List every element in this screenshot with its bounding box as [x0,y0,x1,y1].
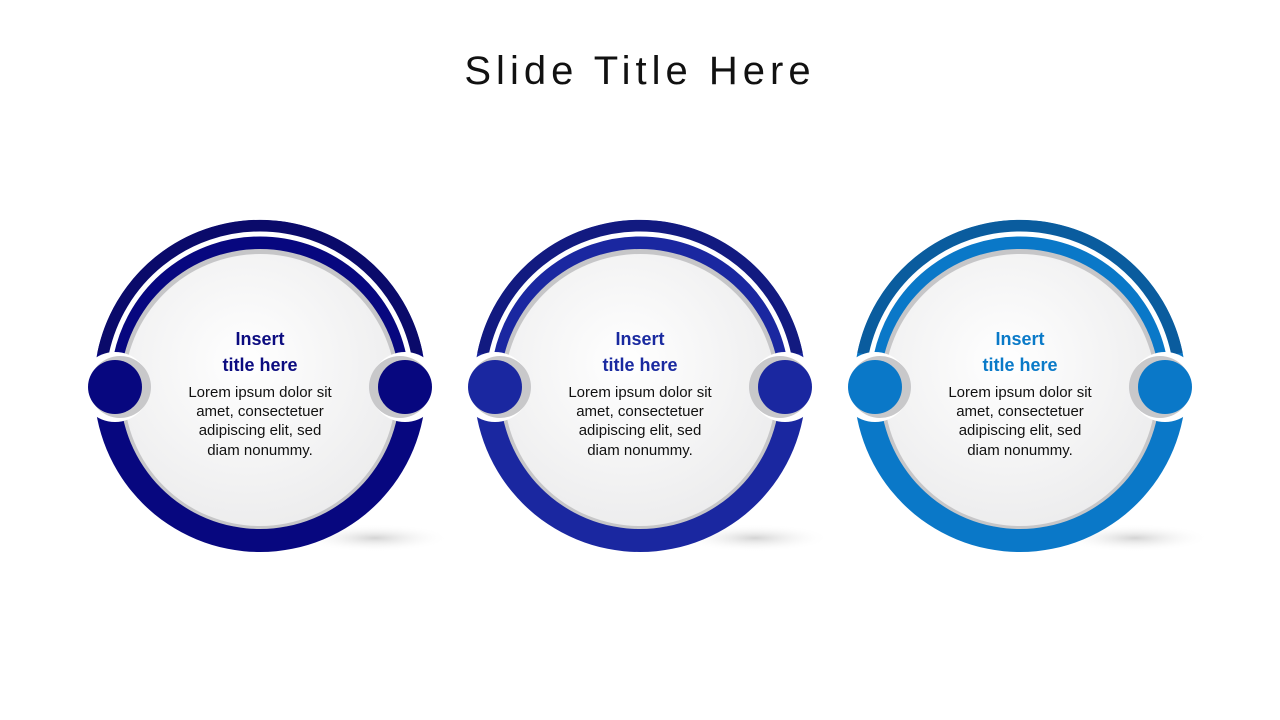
text: step 2: amet, consectetuer [576,403,704,420]
text: step 2: Lorem ipsum dolor sit [568,384,713,401]
panel: step 1 [80,220,450,552]
panel: step 3 [840,220,1210,552]
panel: step 2 [460,220,830,552]
text: step 3: diam nonummy. [967,442,1073,459]
text: step 3: amet, consectetuer [956,403,1084,420]
text: step 2: Insert [615,329,665,349]
text: step 2: diam nonummy. [587,442,693,459]
title: Slide Title Here [464,49,816,93]
text: step 2 [568,329,713,459]
text: step 2: title here [602,355,678,375]
text: step 3: adipiscing elit, sed [959,422,1081,439]
text: step 1: Lorem ipsum dolor sit [188,384,333,401]
text: step 3: Lorem ipsum dolor sit [948,384,1093,401]
text: step 1: title here [222,355,298,375]
text: step 1: Insert [235,329,285,349]
text: step 1: diam nonummy. [207,442,313,459]
text: step 3 [948,329,1093,459]
text: step 3: Insert [995,329,1045,349]
text: step 3: title here [982,355,1058,375]
text: step 2: adipiscing elit, sed [579,422,701,439]
text: step 1: amet, consectetuer [196,403,324,420]
text: step 1 [188,329,333,459]
text: step 1: adipiscing elit, sed [199,422,321,439]
